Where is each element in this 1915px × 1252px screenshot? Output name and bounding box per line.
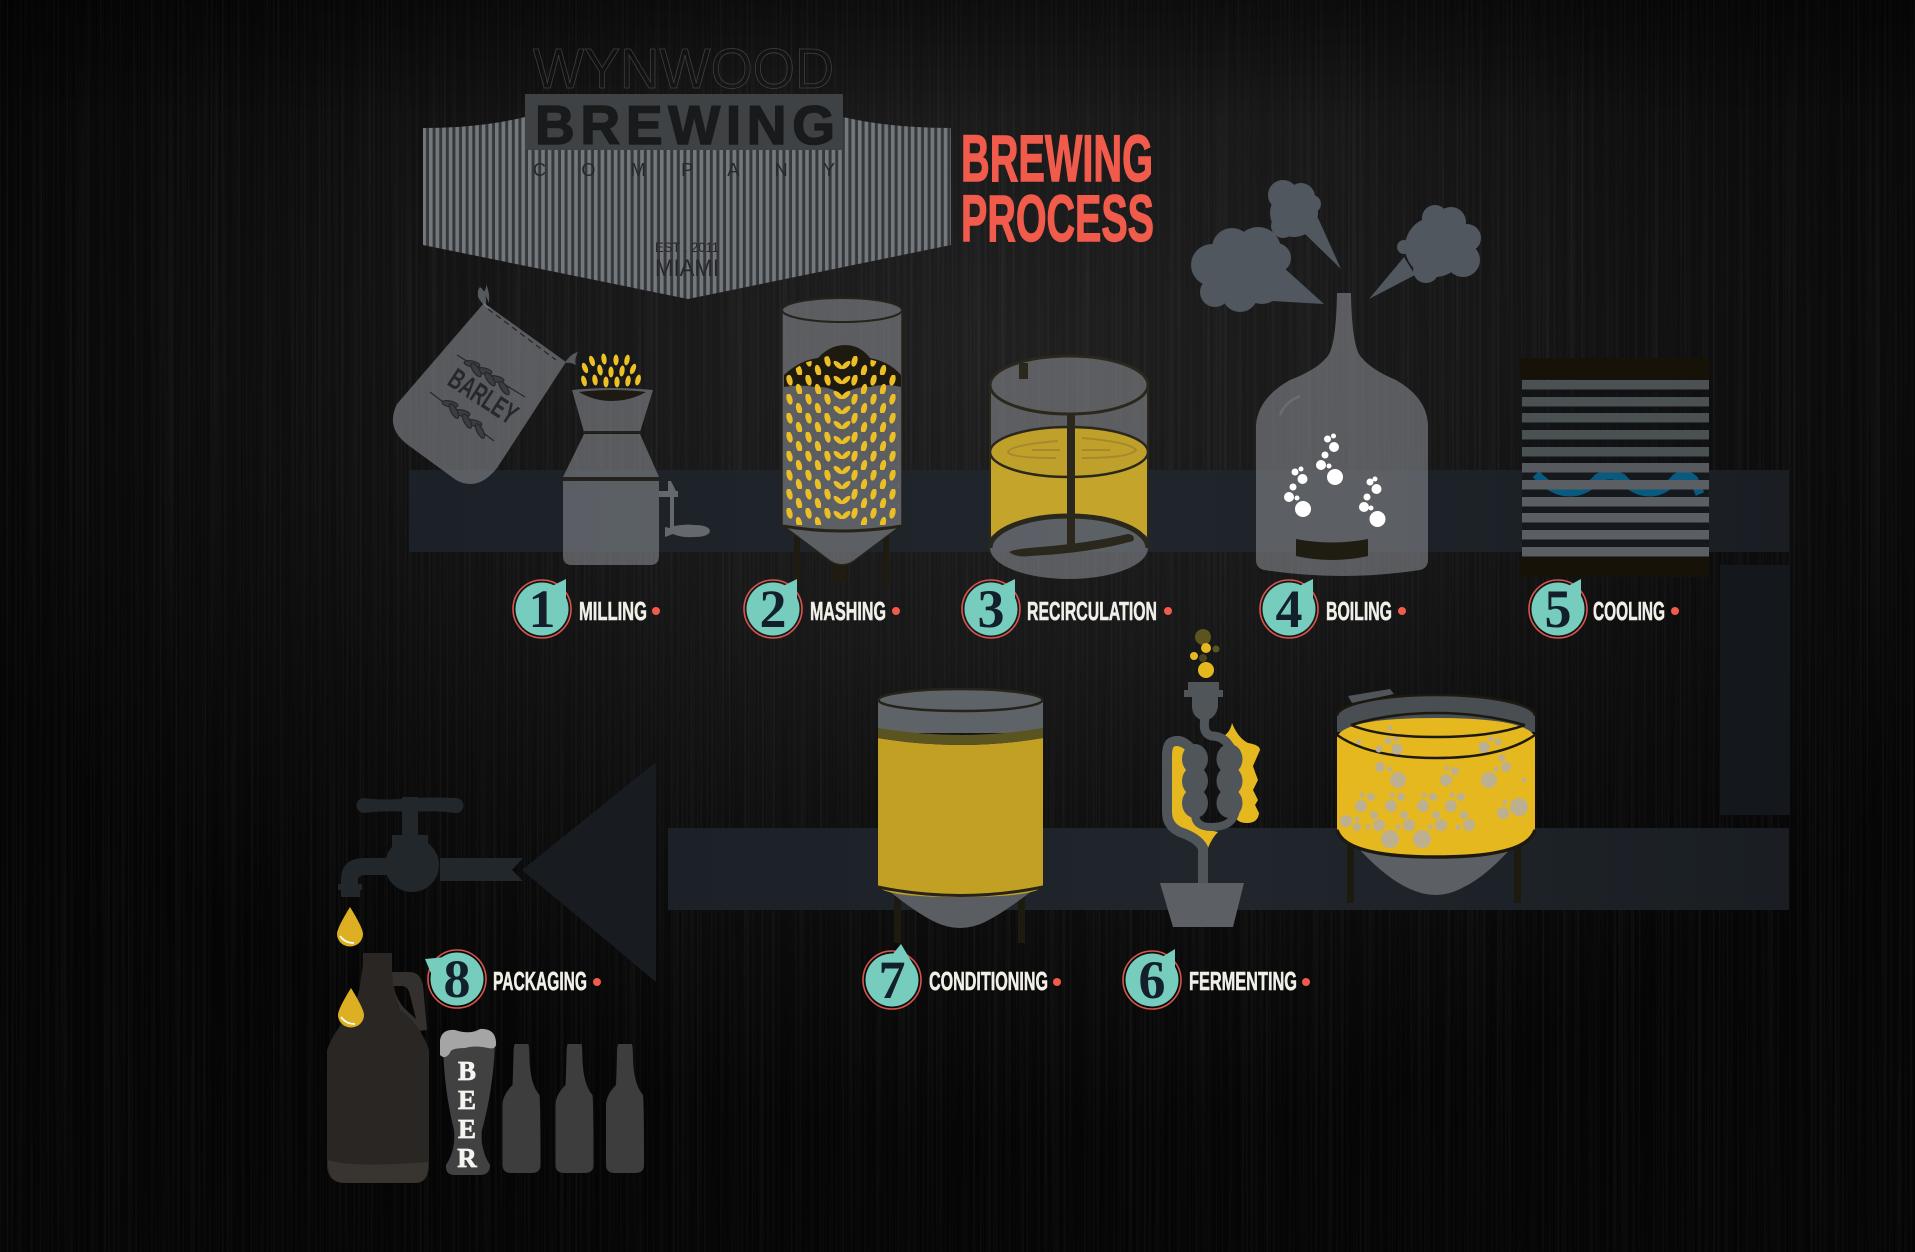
badge 8 packaging: PACKAGING [493, 966, 587, 996]
step 7: conditioning tank [878, 689, 1043, 943]
bag label: BARLEY [442, 363, 523, 431]
badge 6 fermenting: 6 [1138, 950, 1166, 1010]
step 6: airlock [1160, 629, 1260, 927]
growler [327, 953, 429, 1183]
badge 6 fermenting: FERMENTING [1189, 966, 1297, 996]
logo COMPANY: COMPANY [533, 160, 835, 180]
fermenter bubbles [1340, 726, 1528, 848]
fermenter rim [1337, 695, 1535, 732]
arrow head [522, 762, 656, 982]
fermenter outlines [1337, 695, 1535, 857]
step 1: barley bag [393, 284, 578, 484]
step 4: boil kettle [1256, 293, 1428, 576]
badge 7 conditioning [863, 944, 1061, 1010]
step 6: fermenter tank [1337, 689, 1535, 903]
mash legs [794, 535, 889, 587]
fermenter cone [1347, 835, 1522, 895]
badge 3 recirculation: RECIRCULATION [1027, 596, 1157, 626]
airlock bubbles [1190, 629, 1220, 678]
steam cloud left [1191, 227, 1324, 312]
step 3: recirculation tank [990, 356, 1148, 579]
badge 3 recirculation [962, 579, 1172, 639]
step 8: faucet [338, 797, 523, 897]
mill hopper [572, 388, 653, 432]
chiller coil wave [1536, 474, 1700, 494]
conditioning vessel [878, 689, 1043, 733]
pipe: connector [1720, 565, 1790, 815]
badge 3 recirculation: 3 [978, 579, 1004, 639]
beer glass [440, 1029, 496, 1175]
badge 1 milling: MILLING [579, 596, 647, 626]
airlock cup [1160, 883, 1244, 927]
glass lettering: E [458, 1085, 476, 1115]
airlock cap [1184, 682, 1223, 720]
chiller bars [1522, 380, 1709, 556]
kettle bubbles [1284, 434, 1386, 527]
mash body [782, 298, 902, 565]
badge 7 conditioning: 7 [878, 950, 906, 1010]
airlock liquid [1170, 745, 1218, 848]
fermenter handle [1348, 689, 1394, 703]
steam cloud top [1268, 180, 1341, 269]
step 1: mill [563, 353, 710, 565]
kettle burner [1296, 539, 1368, 560]
mash grains [785, 352, 899, 525]
step 2: mash tun [782, 298, 902, 587]
badge 5 cooling: COOLING [1593, 596, 1665, 626]
kettle body [1256, 293, 1428, 576]
grain pile [580, 353, 642, 388]
mill body [563, 434, 659, 565]
badge 7 conditioning: CONDITIONING [929, 966, 1048, 996]
badge 8 packaging: 8 [444, 949, 470, 1009]
badge 1 milling: 1 [528, 579, 556, 639]
lower drop [338, 988, 364, 1028]
mash dome [784, 345, 901, 395]
fermenter liquid [1337, 718, 1535, 857]
chiller backing [1522, 380, 1709, 557]
logo MIAMI: MIAMI [655, 255, 719, 282]
badge 6 fermenting [1123, 949, 1310, 1010]
process pipes [409, 470, 1790, 982]
badge 2 mashing [744, 579, 900, 639]
conditioning outlines [878, 689, 1043, 896]
chiller caps [1520, 358, 1709, 379]
steam cloud right [1369, 205, 1481, 299]
badge 5 cooling [1529, 579, 1679, 639]
fermenter legs [1347, 845, 1521, 903]
glass lettering: B [458, 1056, 476, 1086]
logo banner [525, 94, 843, 150]
wheat stalks [430, 355, 525, 441]
title [961, 121, 1154, 255]
upper drop [337, 907, 363, 946]
glass lettering: R [457, 1143, 477, 1173]
glass lettering [457, 1056, 477, 1173]
conditioning liquid [878, 738, 1043, 897]
airlock tube [1167, 716, 1234, 883]
title: PROCESS [961, 181, 1154, 255]
recirc shaft and paddle [1009, 363, 1134, 556]
badge 1 milling [513, 579, 660, 639]
logo shield [423, 94, 951, 299]
badge 4 boiling: 4 [1276, 579, 1302, 639]
step 5: wort chiller [1520, 358, 1709, 577]
step 4: steam clouds [1191, 180, 1481, 312]
title: BREWING [961, 121, 1153, 195]
recirc glass [990, 356, 1148, 579]
logo WYNWOOD: WYNWOOD [533, 37, 834, 101]
badge 5 cooling: 5 [1544, 579, 1572, 639]
airlock chambers [1182, 744, 1242, 827]
badge 4 boiling: BOILING [1326, 596, 1392, 626]
badge 2 mashing: 2 [760, 579, 786, 639]
conditioning cone [888, 890, 1033, 928]
glass lettering: E [458, 1114, 476, 1144]
badge 8 packaging [425, 949, 601, 1009]
mill crank [659, 481, 710, 537]
pipe: lower band [668, 828, 1789, 910]
step 8: beer drops [337, 907, 363, 946]
logo: Wynwood Brewing Company [423, 37, 951, 299]
conditioning legs [894, 895, 1025, 943]
recirc liquid [990, 427, 1148, 537]
logo BREWING: BREWING [535, 94, 835, 156]
badge 4 boiling [1260, 579, 1406, 639]
recirc outlines [990, 356, 1148, 548]
badge 2 mashing: MASHING [810, 596, 886, 626]
bottles [502, 1044, 644, 1173]
pipe: upper band [409, 470, 1789, 552]
logo EST: EST . 2011 [655, 239, 719, 255]
